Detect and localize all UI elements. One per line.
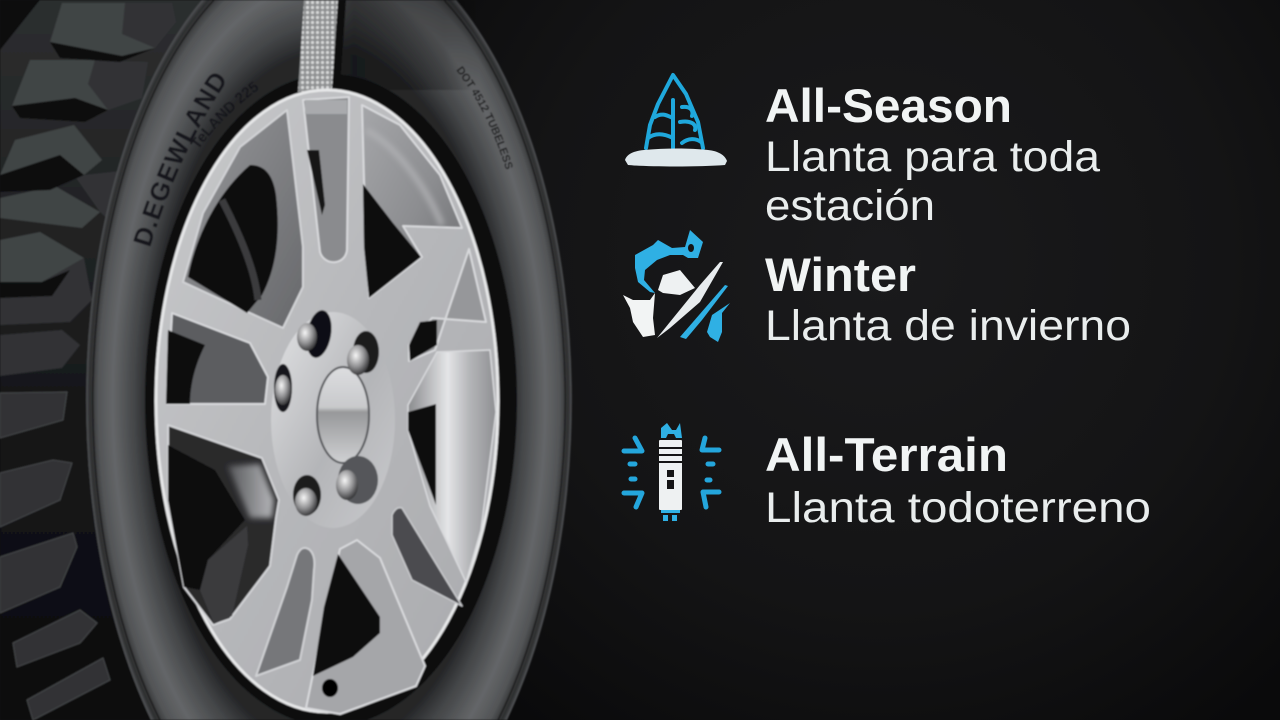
icon: tread profile with arrows: [624, 423, 719, 521]
icon: snowy tree: [625, 75, 727, 166]
subtitle: Llanta todoterreno: Llanta todoterreno: [765, 484, 1151, 532]
window: lower right narrow: [392, 508, 462, 606]
wheel windows: [166, 97, 496, 714]
sidewall brand text: D.EGEWLAND: [133, 73, 225, 246]
item: Winter: [623, 230, 1131, 350]
window: left middle: [166, 313, 268, 404]
lug nut holes: [274, 308, 379, 516]
window: upper right: [362, 105, 462, 298]
heading: All-Terrain: All-Terrain: [765, 428, 1008, 481]
heading: All-Season: All-Season: [765, 79, 1012, 132]
alloy wheel: [156, 90, 498, 714]
rim disc: [156, 90, 498, 712]
silver strip at the top of the tire: [298, 0, 346, 92]
tire sidewall: [86, 0, 572, 720]
center cap: [317, 367, 369, 463]
item: All-Season: [625, 75, 1100, 230]
sidewall groove lines: [93, 0, 565, 720]
icon: snow storm: [623, 230, 730, 342]
valve hole: [322, 679, 338, 697]
subtitle: Llanta para toda estación: estación: [765, 182, 935, 230]
tire and wheel photo: [0, 0, 572, 720]
tire tread with lugs: [0, 0, 240, 720]
window: bottom: [306, 540, 425, 714]
hub recess: [271, 312, 395, 528]
window: right triangle: [409, 249, 486, 361]
heading: Winter: Winter: [765, 248, 916, 301]
subtitle: Llanta de invierno: Llanta de invierno: [765, 302, 1131, 350]
window: top narrow: [303, 97, 349, 262]
dark bead ring around the rim: [145, 74, 517, 720]
sidewall inner label: TeLAND 225: [190, 82, 258, 147]
item: All-Terrain: [624, 423, 1151, 532]
subtitle: Llanta para toda estación: Llanta para toda: [765, 133, 1100, 181]
window: right large: [408, 350, 496, 582]
window: left lower: [168, 425, 279, 625]
window: upper left: [183, 110, 303, 328]
sidewall right label: DOT 4512 TUBELESS: [456, 66, 513, 170]
window: bottom narrow: [256, 548, 314, 676]
shaded top of sidewall: [300, 0, 480, 90]
